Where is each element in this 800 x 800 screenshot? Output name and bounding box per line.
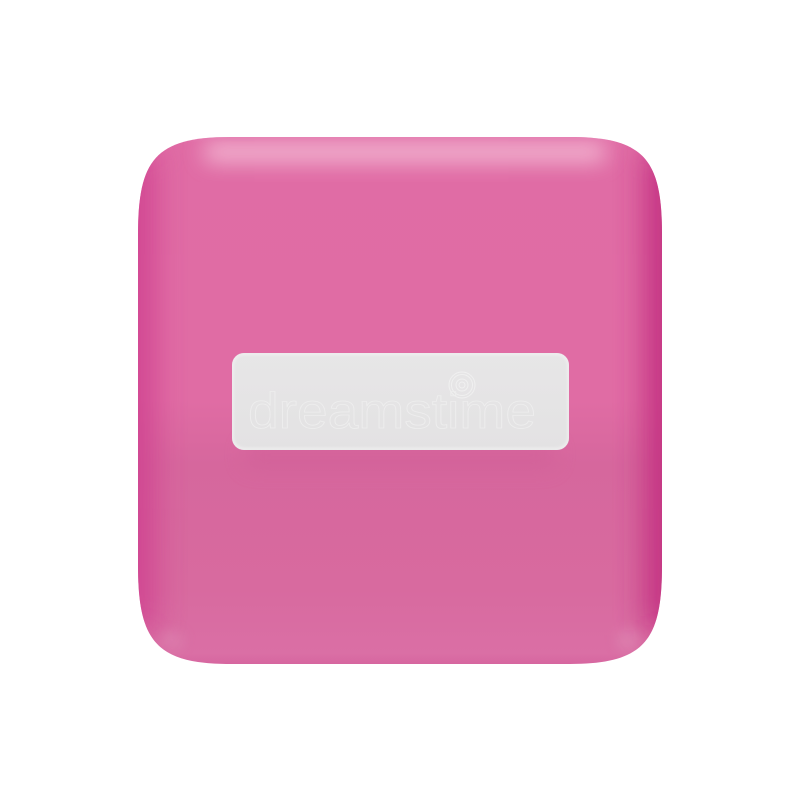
icon: white minus bar: [232, 353, 569, 450]
left side shading: [138, 152, 168, 638]
icon: pink rounded square with white minus: [138, 137, 662, 664]
minus bar shadow: [245, 442, 555, 468]
top highlight: [205, 142, 605, 162]
bottom-left corner glow: [164, 632, 179, 646]
bottom-right corner glow: [618, 630, 640, 649]
watermark spiral: [449, 372, 475, 398]
top rim: [208, 137, 585, 138]
watermark text: dreamstime: [248, 383, 536, 439]
panel: pink rounded square: [138, 137, 662, 664]
right side shading: [628, 148, 662, 640]
